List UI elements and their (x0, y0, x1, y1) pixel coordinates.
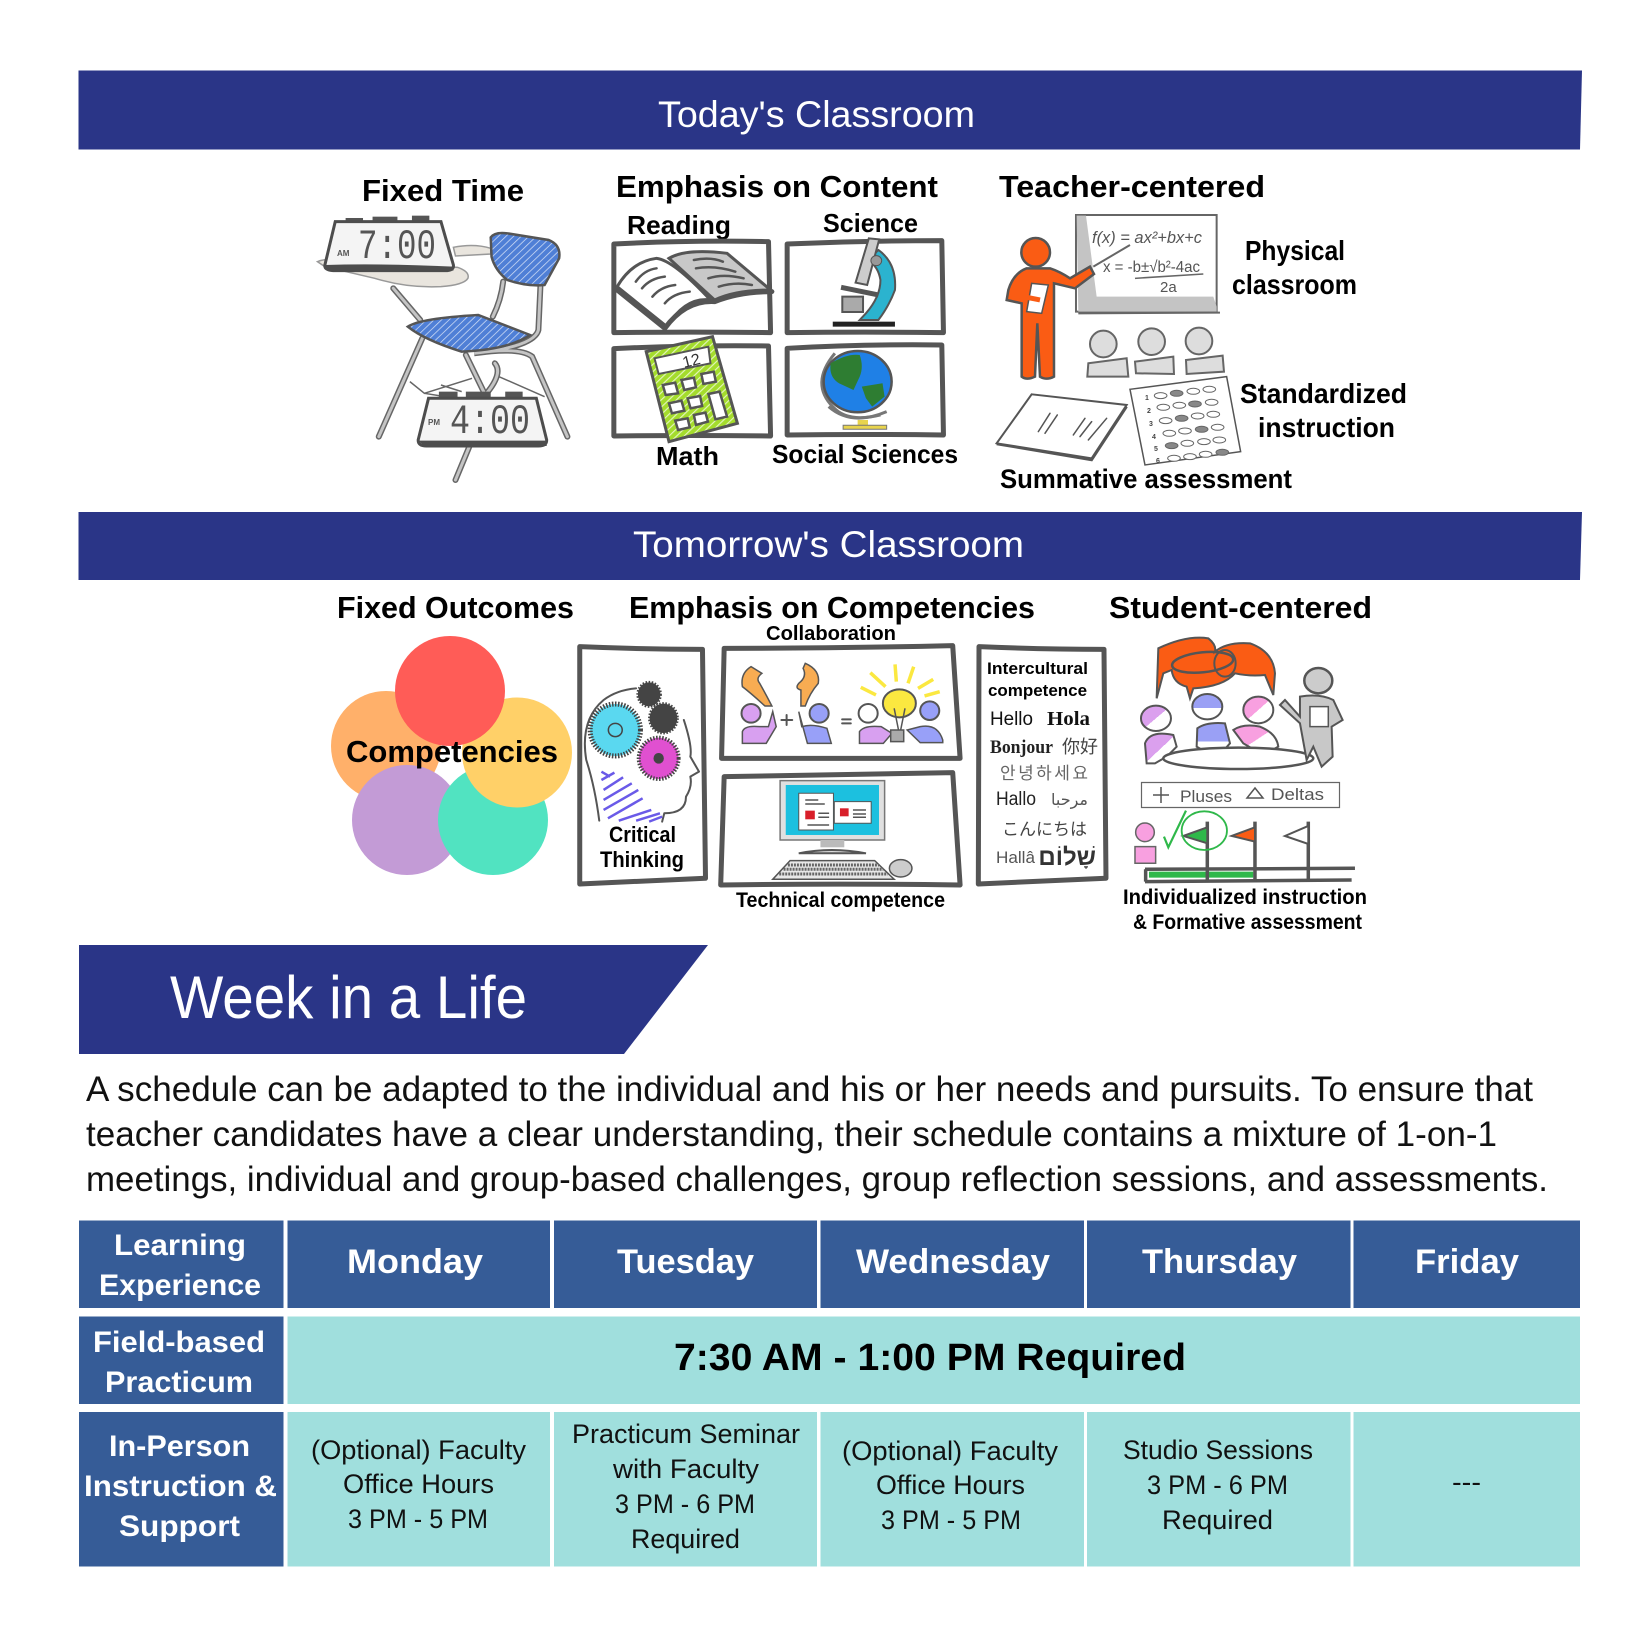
table header row (79, 1220, 1580, 1308)
banner: Today's Classroom (78, 70, 1582, 150)
panel: Intercultural competence: مرحبا (1051, 790, 1088, 810)
text block: schedule description (86, 1070, 1548, 1199)
label: Physical classroom: classroom (1232, 269, 1357, 300)
text block: schedule description: meetings, individual and group-based challenges, group reflection sessions, and assessments. (86, 1160, 1548, 1199)
table header row: Monday (347, 1243, 483, 1281)
icon: teacher at whiteboard with students: 3 (1149, 421, 1153, 428)
label: Standardized instruction (1240, 378, 1407, 443)
banner: Week in a Life (79, 945, 708, 1054)
table row: In-Person Instruction and Support: Instruction & (84, 1470, 277, 1503)
banner: Week in a Life: Week in a Life (170, 964, 527, 1031)
panel: Social Sciences (772, 345, 958, 469)
panel: Social Sciences: Social Sciences (772, 439, 958, 469)
panel: Intercultural competence: Hallâ (996, 848, 1036, 867)
label: Physical classroom (1232, 235, 1357, 300)
panel: Reading (614, 210, 772, 333)
icon: teacher at whiteboard with students: 6 (1156, 458, 1160, 465)
panel: Technical competence: Technical competence (736, 889, 945, 912)
panel: Collaboration: Collaboration (766, 623, 896, 645)
panel: Critical Thinking: Thinking (600, 847, 684, 872)
banner: Tomorrow's Classroom (78, 512, 1582, 580)
label: Standardized instruction: Standardized (1240, 378, 1407, 409)
heading: Fixed Time: Fixed Time (362, 173, 524, 208)
icon: teacher at whiteboard with students: 2a (1160, 279, 1177, 296)
heading: Teacher-centered: Teacher-centered (999, 169, 1265, 204)
panel: Math (614, 337, 771, 471)
column: Teacher-centered (997, 169, 1407, 494)
cell: Tuesday: 3 PM - 6 PM (615, 1489, 755, 1519)
cell: Wednesday: 3 PM - 5 PM (881, 1505, 1021, 1535)
label: Summative assessment: Summative assessment (1000, 464, 1292, 494)
cell: Thursday: Studio Sessions (1123, 1435, 1313, 1465)
table header row: Learning (114, 1229, 246, 1262)
panel: Intercultural competence: Bonjour (990, 737, 1054, 758)
cell: Tuesday: Required (631, 1524, 740, 1554)
column: Fixed Time (317, 173, 567, 480)
icon: progress flags on a timeline (1135, 811, 1355, 882)
diagram: competencies overlapping circles: Competencies (346, 734, 558, 769)
table row: In-Person Instruction and Support: Support (119, 1510, 240, 1543)
box: Pluses and Deltas: Pluses (1180, 787, 1232, 806)
heading: Emphasis on Competencies: Emphasis on Competencies (629, 590, 1035, 625)
cell: Thursday: 3 PM - 6 PM (1147, 1470, 1288, 1500)
table header row: Experience (99, 1269, 261, 1302)
icon: teacher at whiteboard with students: 2 (1147, 408, 1151, 415)
column: Fixed Outcomes (331, 590, 574, 875)
column: Emphasis on Competencies (580, 590, 1106, 912)
box: Pluses and Deltas: Deltas (1271, 785, 1324, 804)
panel: Critical Thinking (580, 647, 706, 884)
panel: Intercultural competence: Intercultural (987, 659, 1088, 678)
icon: teacher at whiteboard with students: 4 (1152, 434, 1156, 441)
table row: Field-based Practicum: 7:30 AM - 1:00 PM Required (674, 1337, 1186, 1379)
label: Individualized instruction and Formative assessment (1123, 886, 1367, 934)
text block: schedule description: A schedule can be adapted to the individual and his or her needs and pursuits. To ensure that (86, 1070, 1533, 1109)
panel: Math: 12 (681, 351, 702, 372)
banner: Today's Classroom: Today's Classroom (658, 94, 975, 135)
table row: Field-based Practicum (79, 1316, 1580, 1404)
label: Individualized instruction and Formative assessment: Individualized instruction (1123, 886, 1367, 909)
cell: Friday: --- (1452, 1467, 1481, 1497)
column: Emphasis on Content (614, 169, 958, 471)
panel: Intercultural competence: こんにちは (1002, 815, 1087, 840)
icon: school desk chair with clocks: AM (337, 249, 350, 258)
panel: Intercultural competence: competence (988, 681, 1087, 700)
panel: Intercultural competence: 你好 (1062, 733, 1098, 759)
label: Physical classroom: Physical (1245, 235, 1345, 266)
icon: school desk chair with clocks: 4:00 (450, 398, 530, 446)
cell: Monday: Office Hours (343, 1469, 494, 1499)
table row: In-Person Instruction and Support (79, 1412, 1580, 1566)
cell: Monday: 3 PM - 5 PM (348, 1504, 488, 1534)
cell: Monday: (Optional) Faculty (311, 1435, 526, 1465)
label: Individualized instruction and Formative assessment: & Formative assessment (1133, 911, 1362, 934)
cell: Monday (311, 1435, 526, 1534)
panel: Intercultural competence (978, 647, 1106, 884)
cell: Tuesday (572, 1419, 800, 1554)
table header row: Tuesday (617, 1243, 754, 1281)
panel: Science: Science (823, 208, 918, 238)
cell: Tuesday: with Faculty (612, 1454, 760, 1484)
cell: Wednesday: (Optional) Faculty (842, 1436, 1059, 1466)
icon: school desk chair with clocks: PM (428, 418, 440, 427)
table row: Field-based Practicum: Field-based (93, 1326, 265, 1359)
table row: In-Person Instruction and Support: In-Person (109, 1430, 250, 1463)
cell: Thursday (1123, 1435, 1313, 1535)
panel: Technical competence (721, 773, 960, 912)
table header row: Friday (1415, 1243, 1519, 1281)
table row: Field-based Practicum: Practicum (105, 1366, 253, 1399)
cell: Wednesday: Office Hours (876, 1470, 1025, 1500)
column: Student-centered (1109, 590, 1372, 934)
table header row: Wednesday (856, 1243, 1050, 1281)
panel: Intercultural competence: שָׁלוֹם (1038, 844, 1096, 871)
icon: teacher at whiteboard with students: 5 (1154, 446, 1158, 453)
panel: Science (787, 208, 943, 333)
panel: Intercultural competence: Hallo (996, 789, 1036, 810)
cell: Thursday: Required (1162, 1505, 1273, 1535)
text block: schedule description: teacher candidates have a clear understanding, their schedule contains a mixture of 1-on-1 (86, 1115, 1497, 1154)
icon: teacher at whiteboard with students: f(x) = ax²+bx+c (1092, 228, 1202, 247)
heading: Emphasis on Content: Emphasis on Content (616, 169, 938, 204)
icon: teacher at whiteboard with students: 1 (1145, 395, 1149, 402)
icon: students around a table with speech bubbles (1141, 638, 1343, 769)
panel: Intercultural competence: Hello (990, 709, 1033, 730)
panel: Collaboration (722, 623, 960, 758)
heading: Fixed Outcomes: Fixed Outcomes (337, 590, 574, 625)
table header row: Thursday (1142, 1243, 1297, 1281)
icon: school desk chair with clocks: 7:00 (358, 223, 436, 271)
panel: Critical Thinking: Critical (609, 822, 676, 847)
icon: teacher at whiteboard with students: x = -b±√b²-4ac (1103, 259, 1200, 276)
diagram: competencies overlapping circles (331, 636, 572, 875)
panel: Math: Math (656, 441, 719, 471)
cell: Tuesday: Practicum Seminar (572, 1419, 800, 1449)
table: weekly schedule (79, 1220, 1580, 1566)
icon: teacher at whiteboard with students (997, 215, 1241, 465)
label: Standardized instruction: instruction (1258, 412, 1395, 443)
icon: school desk chair with clocks (317, 216, 567, 480)
panel: Intercultural competence: Hola (1047, 708, 1090, 730)
panel: Intercultural competence: 안녕하세요 (1000, 759, 1088, 784)
cell: Wednesday (842, 1436, 1059, 1535)
heading: Student-centered: Student-centered (1109, 590, 1372, 625)
banner: Tomorrow's Classroom: Tomorrow's Classroom (633, 524, 1024, 565)
panel: Reading: Reading (627, 210, 731, 240)
box: Pluses and Deltas (1142, 782, 1340, 808)
